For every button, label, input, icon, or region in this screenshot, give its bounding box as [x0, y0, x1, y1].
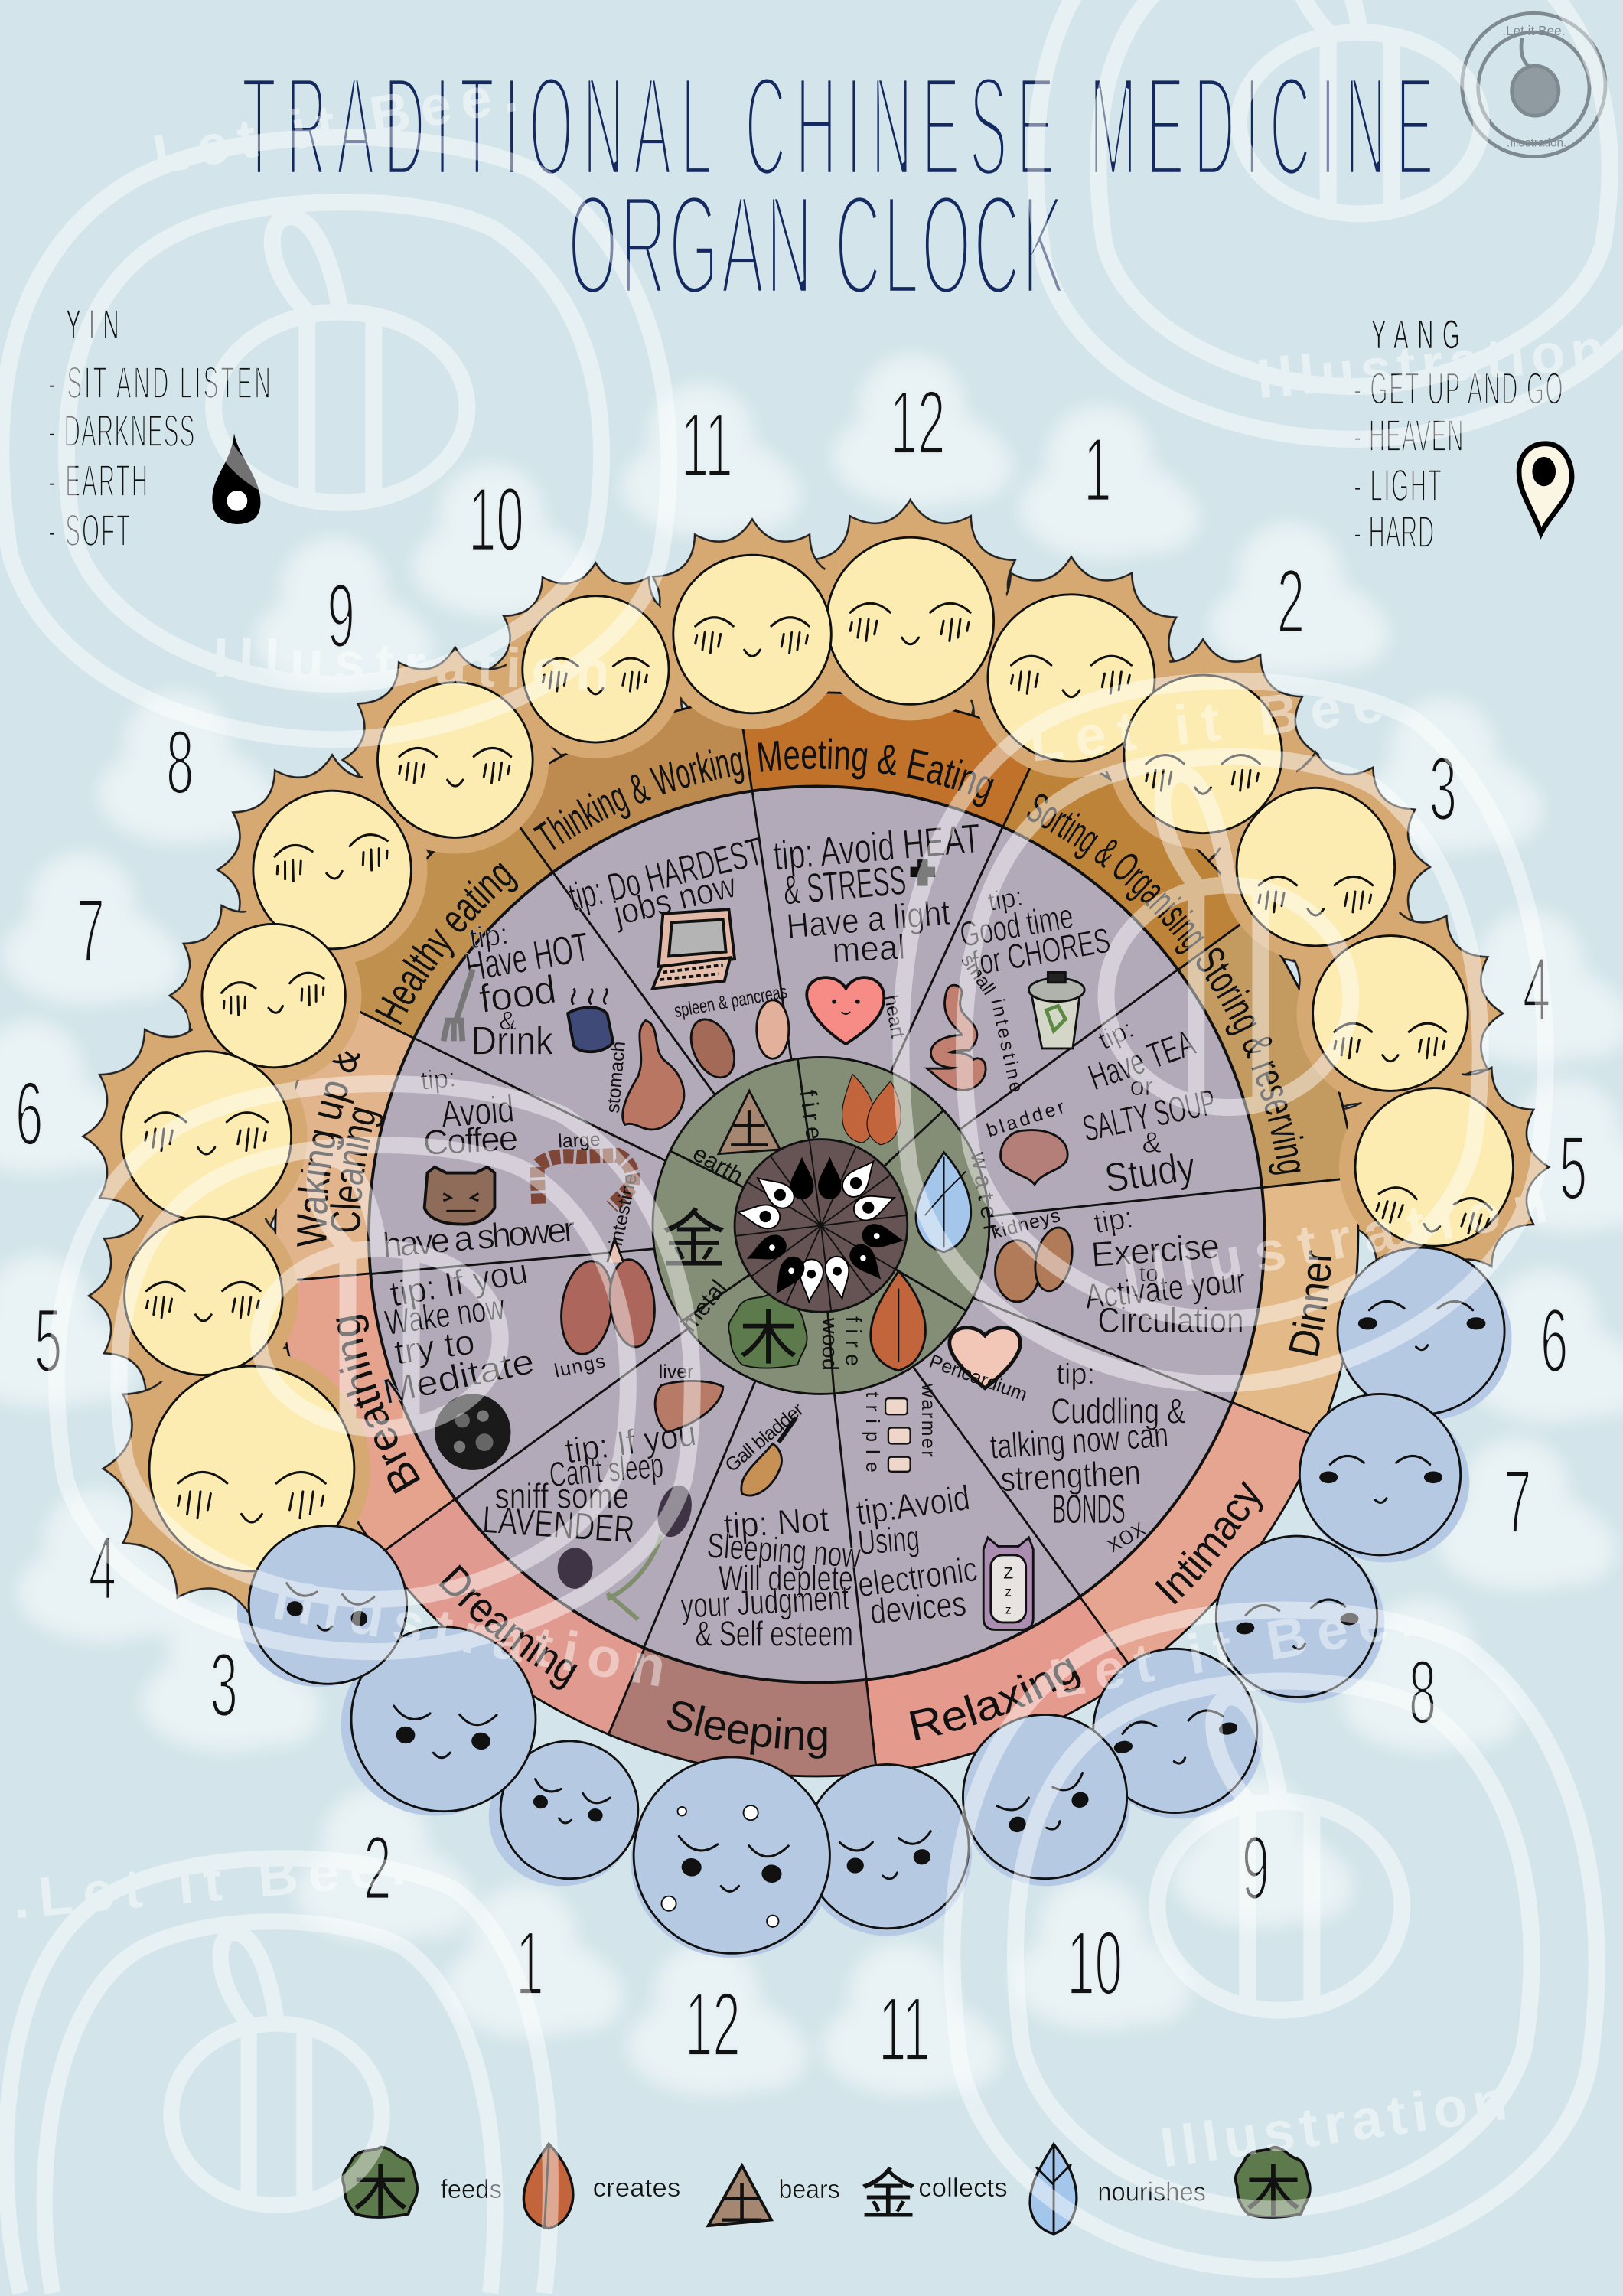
moon 11: [805, 1764, 969, 1929]
yin list: - SIT AND LISTEN: [48, 357, 271, 408]
watermarks: Let it Bee: Let it Bee.: [1045, 1583, 1429, 1711]
logo: Let it Bee stamp: [1462, 13, 1605, 157]
yang list: - HEAVEN: [1354, 410, 1464, 461]
text: hardest jobs: tip: Do HARDEST: [564, 829, 767, 919]
hour numbers: 9: [1242, 1818, 1269, 1919]
text: cuddling: BONDS: [1052, 1487, 1126, 1532]
text: chores: Good time: [957, 895, 1076, 954]
text: cuddling: strengthen: [999, 1452, 1142, 1499]
panel: healthy eating tip: [443, 918, 684, 1130]
legend: wood: 木: [353, 2161, 409, 2223]
legend: water: [1030, 2144, 1077, 2234]
hour numbers: 6: [15, 1064, 43, 1165]
element: wood: wood: [817, 1317, 842, 1371]
icon: small intestine: [938, 993, 978, 1082]
panel: breathing tip: [380, 1239, 659, 1470]
legend: wood repeat: 木: [1246, 2161, 1301, 2223]
element: metal: metal: [676, 1275, 732, 1336]
text: exercise: [1083, 1201, 1247, 1340]
icon: hot drink: [568, 988, 613, 1052]
title: [242, 47, 1434, 325]
moon 6: [1338, 1247, 1504, 1414]
sun 4: [149, 1366, 354, 1571]
band: Waking up & Cleaning: Waking up &: [297, 1051, 360, 1247]
text: hardest jobs: [564, 829, 767, 934]
sun 9: [377, 683, 533, 837]
text: hot food: Drink: [471, 1019, 553, 1063]
band: Sorting & Organising: Sorting & Organising: [1027, 794, 1204, 954]
label: creates: creates: [593, 2174, 680, 2203]
band: Intimacy: [1082, 1402, 1310, 1662]
hour numbers: 10: [1067, 1913, 1123, 2014]
hour numbers: 8: [1409, 1642, 1436, 1743]
watermarks: Let it Bee: .Let it Bee.: [123, 60, 532, 191]
label: feeds: feeds: [441, 2175, 502, 2204]
band: Breathing: Breathing: [336, 1315, 421, 1494]
text: meditate: tip: If you: [387, 1251, 531, 1314]
hour numbers: 1: [516, 1913, 543, 2014]
hour numbers: 9: [327, 566, 355, 667]
panel: dreaming tip: [481, 1361, 723, 1619]
text: hot food: &: [499, 1006, 517, 1035]
icon: gall bladder: [741, 1417, 796, 1495]
icon: lavender: [558, 1482, 697, 1619]
band: Dreaming: Dreaming: [439, 1564, 578, 1690]
icon: lungs: [556, 1239, 659, 1358]
moon shadows: [237, 1257, 1512, 1958]
label: bladder: bladder: [984, 1096, 1067, 1141]
clouds behind the hour numbers: [0, 354, 1623, 2095]
text: avoid heat: tip: Avoid HEAT: [771, 816, 983, 879]
label: bears: bears: [778, 2175, 840, 2204]
panel: intimacy tip: [927, 1328, 1185, 1559]
label: gall bladder: Gall bladder: [721, 1399, 808, 1476]
element: fire bottom: [840, 1271, 925, 1371]
hour numbers: 1: [1084, 419, 1112, 520]
panel: waking tip: [381, 1063, 641, 1265]
text: not sleeping: & Self esteem: [695, 1614, 853, 1654]
text: exercise: Exercise: [1090, 1225, 1221, 1274]
element: wood: 木: [739, 1306, 797, 1372]
sun 3: [1237, 788, 1395, 946]
label: collects: collects: [918, 2174, 1008, 2203]
label: lungs: lungs: [552, 1350, 607, 1382]
text: avoid heat: & STRESS: [781, 858, 908, 914]
hour numbers: 4: [1523, 939, 1550, 1041]
band: Storing & reserving: Storing & reserving: [1197, 947, 1304, 1175]
text: not sleeping: your Judgment: [680, 1577, 850, 1626]
band: Breathing: [285, 1274, 455, 1551]
icon: yin drop: [212, 433, 260, 524]
hour numbers: 5: [1559, 1117, 1587, 1219]
panel: dinner tip: [989, 1201, 1247, 1340]
text: meditate: try to: [392, 1322, 477, 1372]
text: exercise: Circulation: [1097, 1300, 1244, 1340]
hour numbers: 3: [1429, 739, 1457, 840]
hour numbers: 7: [1504, 1452, 1531, 1553]
text: meditate: Wake now: [383, 1287, 507, 1342]
text: avoid coffee: Avoid: [439, 1087, 516, 1137]
band: Relaxing: Relaxing: [909, 1658, 1080, 1740]
sun rays: [83, 500, 1549, 1617]
text: hot food: food: [477, 967, 559, 1021]
text: meditate: Meditate: [380, 1341, 538, 1411]
text: chores: tip:: [986, 882, 1025, 917]
hour numbers: 3: [210, 1635, 238, 1736]
panel: thinking tip: [564, 829, 789, 1084]
moon 7: [1299, 1394, 1461, 1555]
text: electronic devices: devices: [869, 1583, 968, 1632]
yin yang hours disc: [735, 1140, 908, 1312]
band: Thinking & Working: Thinking & Working: [533, 749, 744, 850]
band: Intimacy: Intimacy: [1155, 1480, 1263, 1605]
yang list: - HARD: [1354, 507, 1434, 557]
moon 12: [634, 1757, 829, 1953]
tips disc: [369, 786, 1264, 1682]
text: tea and soup: or: [1129, 1072, 1153, 1101]
label: small intestine: small: [957, 951, 999, 999]
moon 2: [351, 1627, 536, 1812]
text: avoid heat: meal: [831, 927, 906, 970]
moon 10: [963, 1714, 1127, 1879]
watermarks: Let it Bee: Let it Bee.: [1026, 667, 1425, 774]
element: earth: [689, 1091, 780, 1189]
yin list: [48, 302, 271, 556]
text: not sleeping: Will deplete: [719, 1558, 853, 1598]
text: chores: for CHORES: [970, 920, 1113, 983]
legend: fire: [523, 2144, 573, 2229]
yin list: - SOFT: [48, 506, 130, 556]
element: water: water: [965, 1150, 1005, 1234]
element: wood: [728, 1294, 842, 1372]
hour numbers: 4: [89, 1518, 116, 1619]
text: exercise: tip:: [1091, 1201, 1136, 1240]
panel: relaxing tip: [854, 1383, 1033, 1632]
label: stomach: stomach: [602, 1040, 630, 1114]
sun 1: [988, 595, 1155, 762]
element: metal: 金: [661, 1204, 726, 1276]
moon 3: [249, 1526, 407, 1684]
text: cuddling: xox: [1100, 1513, 1151, 1559]
label: spleen and pancreas: spleen & pancreas: [673, 981, 789, 1022]
icon: spleen: [683, 1013, 743, 1084]
text: exercise: Activate your: [1083, 1260, 1247, 1316]
band: Relaxing: [868, 1597, 1129, 1768]
text: tea and soup: &: [1142, 1127, 1162, 1159]
text: cuddling: talking now can: [989, 1414, 1170, 1466]
icon: plus sign: [911, 859, 935, 886]
element: metal: [661, 1204, 732, 1336]
sun 2: [1124, 675, 1282, 833]
icon: liver: [655, 1381, 723, 1432]
watermarks: Let it Bee: Illustration: [212, 627, 621, 703]
label: large intestine: large: [558, 1129, 601, 1153]
text: lavender: [481, 1413, 699, 1551]
text: tea and soup: Study: [1102, 1144, 1198, 1202]
text: tea and soup: Have TEA: [1084, 1022, 1201, 1098]
band: Sleeping: [608, 1650, 877, 1777]
text: cuddling: [989, 1358, 1185, 1559]
watermarks: Let it Bee: Illustration: [269, 1569, 680, 1701]
panel: meeting tip: [771, 816, 983, 1044]
hour numbers: 2: [1277, 551, 1305, 653]
element: water: [916, 1150, 1005, 1252]
tan surrounds under the suns: [106, 521, 1530, 1587]
text: electronic devices: Using: [856, 1518, 921, 1563]
band: Dinner: Dinner: [1289, 1251, 1331, 1356]
title: ORGAN CLOCK: [568, 164, 1065, 325]
label: small intestine: intestine: [986, 997, 1028, 1094]
text: hot food: [462, 918, 592, 1063]
icon: alarm clock: [983, 1538, 1033, 1629]
band: Meeting & Eating: Meeting & Eating: [758, 738, 994, 807]
legend: earth: 土: [720, 2181, 764, 2230]
label: triple warmer: [862, 1383, 939, 1473]
text: tea and soup: tip:: [1094, 1014, 1138, 1055]
hour numbers: 8: [166, 712, 194, 814]
text: tea and soup: [1079, 1014, 1220, 1202]
band: Meeting & Eating: [744, 692, 1028, 825]
icon: alarm clock: Z: [1003, 1564, 1013, 1583]
hour numbers: 5: [34, 1290, 62, 1392]
legend: element cycle: [343, 2144, 1310, 2234]
band: Dreaming: [386, 1500, 645, 1736]
panel: sleeping tip: [680, 1399, 862, 1654]
text: chores: [957, 882, 1113, 983]
label: small intestine: [957, 951, 1028, 1094]
yang list: - GET UP AND GO: [1354, 364, 1563, 414]
watermarks: Let it Bee: Illustration: [1156, 2069, 1516, 2179]
text: avoid coffee: Coffee: [422, 1118, 519, 1163]
yang list: YANG: [1371, 312, 1460, 358]
text: hardest jobs: jobs now: [608, 864, 741, 934]
sun 4 right: [1313, 936, 1468, 1091]
icon: fork: [443, 970, 473, 1041]
text: avoid heat: Have a light: [785, 892, 952, 946]
band: Waking up & Cleaning: Cleaning: [330, 1107, 383, 1232]
text: exercise: to: [1139, 1261, 1159, 1287]
element: fire top: fire: [795, 1088, 827, 1141]
sun 6: [122, 1052, 292, 1221]
sun 11: [673, 555, 831, 713]
text: cuddling: tip:: [1056, 1358, 1095, 1391]
legend: wood: [343, 2148, 417, 2223]
label: large intestine: [558, 1129, 641, 1247]
icon: pericardium heart: [950, 1328, 1020, 1388]
hour numbers: 2: [363, 1818, 392, 1919]
sun 12: [827, 537, 994, 704]
icon: yang pin: [1519, 444, 1572, 533]
hour numbers: 11: [681, 394, 733, 496]
element: fire top: [795, 1071, 907, 1148]
element: fire bottom: fire: [840, 1316, 865, 1366]
text: not sleeping: [680, 1499, 862, 1654]
text: not sleeping: Sleeping now: [706, 1525, 862, 1575]
hour numbers: 7: [77, 880, 105, 982]
band: Waking up & Cleaning: [275, 997, 816, 1281]
text: not sleeping: tip: Not: [722, 1499, 830, 1546]
hour numbers: 10: [468, 469, 524, 570]
text: avoid coffee: [381, 1063, 577, 1265]
icon: alarm clock: z: [1005, 1583, 1012, 1599]
yang list: [1354, 312, 1563, 557]
sun 7: [202, 924, 345, 1068]
text: avoid coffee: tip:: [419, 1063, 457, 1096]
logo: Let it Bee stamp: .Illustration.: [1507, 136, 1566, 149]
label: pericardium: Pericardium: [927, 1350, 1030, 1406]
band: Healthy eating: Healthy eating: [375, 863, 518, 1025]
moon 9: [1093, 1649, 1257, 1813]
icon: triple warmer cakes: [885, 1398, 911, 1472]
title: TRADITIONAL CHINESE MEDICINE: [242, 47, 1434, 207]
text: electronic devices: electronic: [855, 1548, 979, 1605]
icon: pancreas: [757, 1000, 789, 1058]
yin list: - DARKNESS: [48, 406, 194, 456]
sun 10: [523, 596, 669, 742]
band: Sleeping: Sleeping: [667, 1701, 826, 1759]
yin list: YIN: [66, 302, 119, 347]
hour numbers: 12: [685, 1975, 741, 2076]
label: liver: liver: [659, 1361, 693, 1382]
legend: wood repeat: [1236, 2148, 1310, 2223]
yin list: - EARTH: [48, 455, 148, 506]
label: triple warmer: triple: [862, 1392, 883, 1473]
text: lavender: LAVENDER: [481, 1498, 636, 1551]
icon: cat mug: [425, 1167, 494, 1225]
legend: metal: 金: [861, 2164, 916, 2226]
icon: stomach: [623, 1021, 684, 1130]
hour numbers: 12: [890, 373, 945, 474]
hour numbers: [15, 373, 1587, 2080]
label: heart: heart: [880, 993, 909, 1040]
band: Healthy eating: [330, 797, 816, 1234]
label: large intestine: intestine: [605, 1172, 641, 1247]
moon faces: [249, 1247, 1504, 1953]
text: hot food: Have HOT: [462, 925, 592, 990]
sun 8: [253, 791, 411, 949]
label: kidneys: kidneys: [989, 1205, 1062, 1244]
moon 1: [500, 1741, 638, 1879]
text: lavender: sniff some: [494, 1476, 629, 1516]
panel: sorting tip: [938, 882, 1113, 1094]
element: earth: 土: [728, 1109, 770, 1154]
text: cuddling: Cuddling &: [1051, 1391, 1185, 1431]
text: electronic devices: tip:Avoid: [854, 1477, 973, 1532]
text: meditate: [380, 1251, 538, 1411]
sun 5 right: [1355, 1088, 1514, 1246]
icon: heart: [807, 977, 884, 1044]
five element disc: [653, 1057, 1005, 1394]
watermarks: Let it Bee: Illustration: [1118, 1170, 1565, 1308]
label: triple warmer: warmer: [917, 1383, 939, 1457]
icon: laptop: [653, 909, 735, 988]
text: avoid coffee: have a shower: [381, 1208, 577, 1265]
icon: alarm clock: z: [1005, 1603, 1012, 1616]
text: lavender: Can't sleep: [548, 1445, 665, 1495]
label: nourishes: nourishes: [1097, 2178, 1206, 2207]
icon: bladder: [1001, 1130, 1067, 1185]
sun 5: [125, 1217, 282, 1375]
element: earth: earth: [689, 1140, 748, 1189]
text: hot food: tip:: [468, 918, 510, 955]
legend: earth: [709, 2166, 771, 2230]
panel: storing tip: [984, 1014, 1220, 1202]
icon: chrysanthemum flower: [435, 1394, 510, 1470]
moon 8: [1216, 1536, 1377, 1697]
icon: large intestine: [537, 1156, 633, 1207]
yang list: - LIGHT: [1354, 460, 1442, 510]
hour numbers: 6: [1540, 1290, 1568, 1392]
hour numbers: 11: [878, 1978, 930, 2080]
band: Dinner: [1234, 1179, 1359, 1433]
icon: recycling bin: [1029, 972, 1084, 1049]
text: lavender: tip: If you: [562, 1413, 699, 1471]
sun faces: [122, 537, 1514, 1571]
text: avoid heat: [771, 816, 983, 970]
text: tea and soup: SALTY SOUP: [1079, 1082, 1220, 1150]
watermarks: Let it Bee: Illustration: [1254, 318, 1613, 410]
text: electronic devices: [854, 1477, 979, 1632]
watermarks: Let it Bee: .Let it Bee.: [10, 1834, 419, 1930]
icon: kidneys: [996, 1224, 1077, 1302]
logo: Let it Bee stamp: .Let it Bee.: [1502, 23, 1565, 38]
